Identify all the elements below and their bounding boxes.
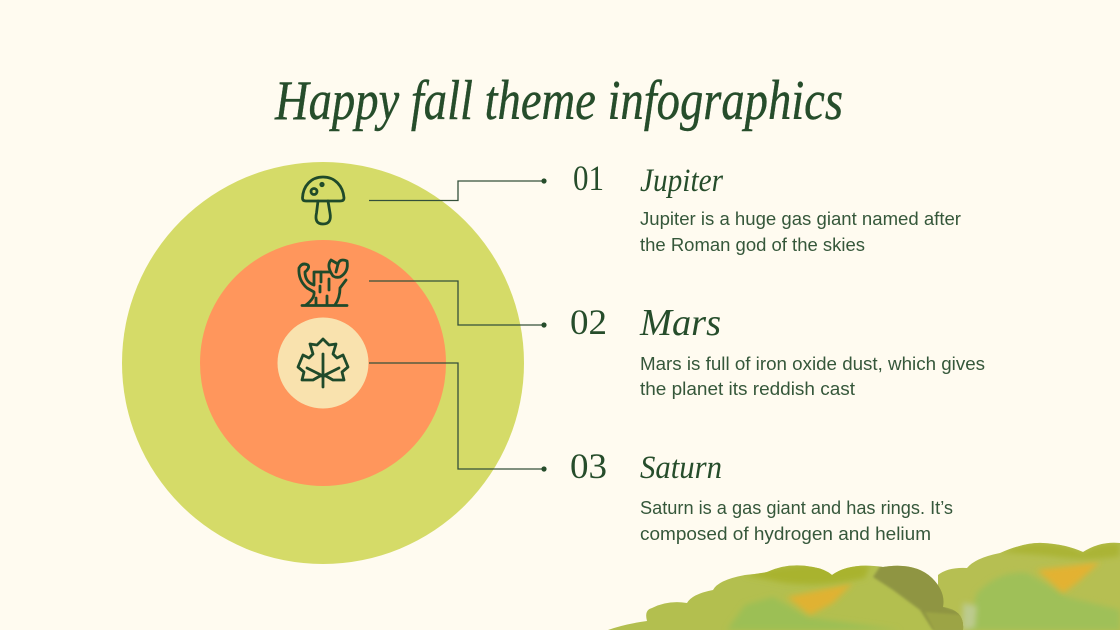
concentric circles diagram — [122, 162, 524, 564]
icon: mushroom — [302, 177, 344, 224]
item 02: Mars: the planet its reddish cast — [640, 379, 855, 399]
title: Happy fall theme infographics — [274, 70, 843, 132]
item 01: Jupiter — [573, 158, 961, 255]
item 01: Jupiter: Jupiter — [640, 163, 723, 199]
watercolor bushes — [600, 535, 1120, 630]
icon: maple leaf — [298, 339, 348, 387]
connector: Jupiter — [369, 178, 547, 200]
item 03: Saturn: 03 — [570, 446, 607, 486]
item 02: Mars: Mars is full of iron oxide dust, which gives — [640, 354, 985, 374]
item 03: Saturn: Saturn — [640, 450, 722, 486]
icon: tree stump with leaf — [299, 260, 347, 306]
item 01: Jupiter: Jupiter is a huge gas giant named after — [640, 209, 961, 229]
item 02: Mars: 02 — [570, 302, 607, 342]
item 03: Saturn: Saturn is a gas giant and has rings. It’s — [640, 498, 953, 518]
item 02: Mars: Mars — [639, 302, 721, 344]
item 01: Jupiter: 01 — [573, 158, 604, 198]
item 02: Mars — [570, 302, 985, 399]
connector: Saturn — [369, 363, 547, 472]
item 03: Saturn — [570, 446, 953, 544]
connector: Mars — [369, 281, 547, 328]
item 01: Jupiter: the Roman god of the skies — [640, 235, 865, 255]
item 03: Saturn: composed of hydrogen and helium — [640, 524, 931, 544]
